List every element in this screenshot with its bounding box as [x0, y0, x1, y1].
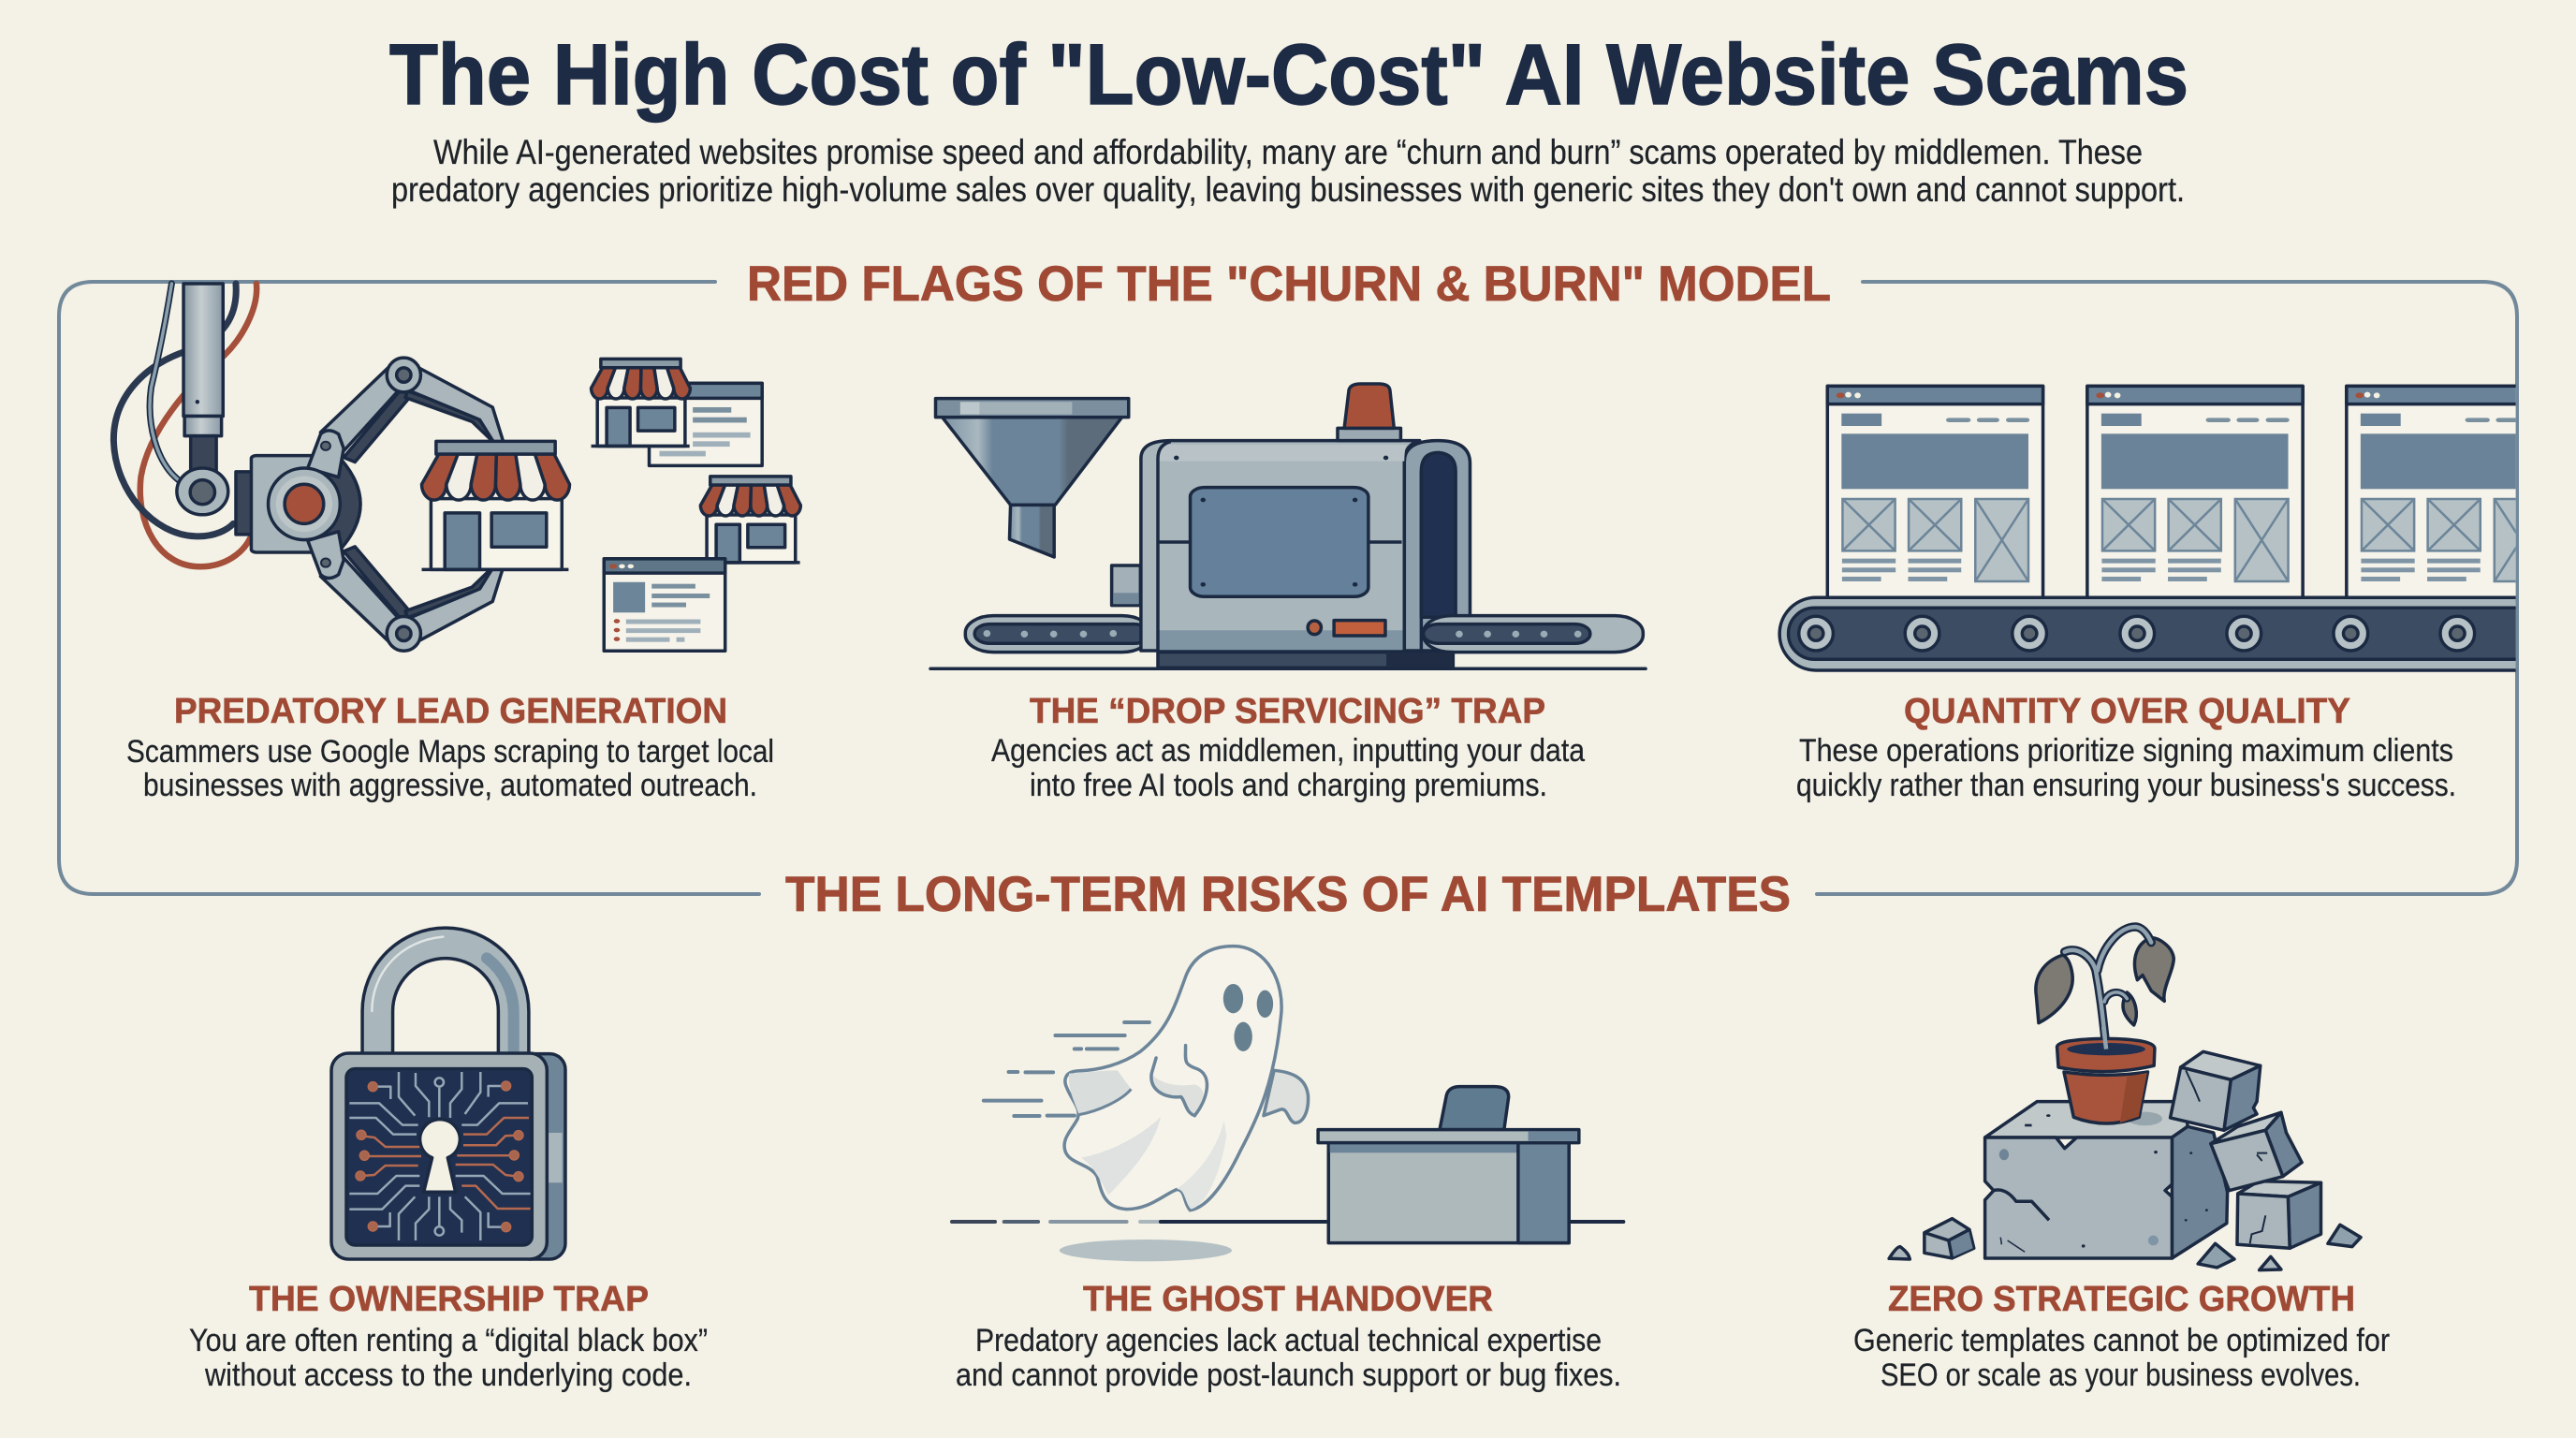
panel: drop servicing trap — [930, 384, 1646, 803]
body text: predatory lead generation: Scammers use Google Maps scraping to target local — [126, 734, 774, 770]
icon: wilting plant on cracked blocks — [1889, 927, 2361, 1270]
icon: website templates on conveyor — [1779, 386, 2576, 670]
frame: red flags section border — [59, 282, 2517, 894]
heading: predatory lead generation: PREDATORY LEAD GENERATION — [174, 692, 727, 731]
body text: drop servicing: Agencies act as middlemen, inputting your data — [991, 733, 1585, 769]
beacon — [1338, 428, 1400, 441]
body text: ghost handover: and cannot provide post-launch support or bug fixes. — [956, 1357, 1621, 1393]
intro text: While AI-generated websites promise speed and affordability, many are “churn and burn” scams operated by middlemen. These — [433, 133, 2143, 171]
icon: funnel and machine on belt — [930, 384, 1646, 668]
heading: ghost handover: THE GHOST HANDOVER — [1083, 1280, 1493, 1319]
cube 1 — [2181, 1051, 2261, 1079]
body text: ghost handover: Predatory agencies lack actual technical expertise — [975, 1323, 1602, 1358]
intro text: predatory agencies prioritize high-volume sales over quality, leaving businesses with generic sites they don't own and cannot support. — [391, 170, 2185, 209]
body text: predatory lead generation: businesses with aggressive, automated outreach. — [143, 768, 757, 803]
heading: drop servicing: THE “DROP SERVICING” TRAP — [1030, 692, 1545, 731]
plant — [2036, 955, 2072, 1023]
heading: long-term risks: THE LONG-TERM RISKS OF AI TEMPLATES — [785, 867, 1791, 922]
storefront small top — [592, 359, 690, 446]
storefront large — [422, 441, 570, 569]
body text: drop servicing: into free AI tools and charging premiums. — [1030, 768, 1547, 803]
panel: predatory lead generation — [113, 284, 800, 803]
machine back arch — [1404, 441, 1470, 651]
body text: quantity over quality — [1796, 733, 2456, 803]
icon: ghost fleeing empty desk — [952, 946, 1623, 1261]
body text: ghost handover — [956, 1323, 1621, 1393]
panel: zero strategic growth — [1853, 927, 2390, 1393]
body text: predatory lead generation — [126, 734, 774, 803]
body text: drop servicing — [991, 733, 1585, 803]
rubble — [1925, 1219, 1974, 1258]
pot — [2064, 1072, 2147, 1123]
browser B — [604, 559, 725, 651]
body text: zero strategic growth: Generic templates cannot be optimized for — [1853, 1323, 2390, 1358]
body text: zero strategic growth: SEO or scale as your business evolves. — [1881, 1357, 2361, 1393]
belt right — [1424, 616, 1643, 653]
panel: ghost handover — [952, 946, 1623, 1393]
icon: robotic claw grabbing storefronts — [113, 284, 800, 651]
belt left — [965, 616, 1150, 653]
cube 2 — [2211, 1112, 2281, 1144]
storefront small middle — [700, 477, 800, 563]
panel: quantity over quality — [1779, 386, 2576, 803]
body text: quantity over quality: quickly rather than ensuring your business's success. — [1796, 768, 2456, 803]
body text: ownership trap: You are often renting a “digital black box” — [189, 1323, 708, 1358]
icon: padlock with circuit board — [331, 937, 565, 1259]
panel: ownership trap — [189, 937, 708, 1393]
big block — [1985, 1102, 2188, 1137]
browser A — [650, 383, 762, 465]
heading: ownership trap: THE OWNERSHIP TRAP — [249, 1280, 649, 1319]
cube 3 — [2238, 1181, 2321, 1196]
body text: zero strategic growth — [1853, 1323, 2390, 1393]
intro text — [391, 133, 2185, 209]
body text: ownership trap: without access to the underlying code. — [204, 1357, 692, 1393]
heading: quantity over quality: QUANTITY OVER QUALITY — [1904, 692, 2350, 731]
machine front — [1141, 441, 1420, 651]
machine base and ground — [1158, 653, 1453, 668]
title: The High Cost of "Low-Cost" AI Website Scams — [389, 27, 2188, 123]
body text: ownership trap — [189, 1323, 708, 1393]
side box — [1112, 565, 1140, 606]
body text: quantity over quality: These operations prioritize signing maximum clients — [1799, 733, 2453, 769]
heading: red flags: RED FLAGS OF THE "CHURN & BURN" MODEL — [747, 257, 1831, 312]
heading: zero strategic growth: ZERO STRATEGIC GROWTH — [1888, 1280, 2355, 1319]
